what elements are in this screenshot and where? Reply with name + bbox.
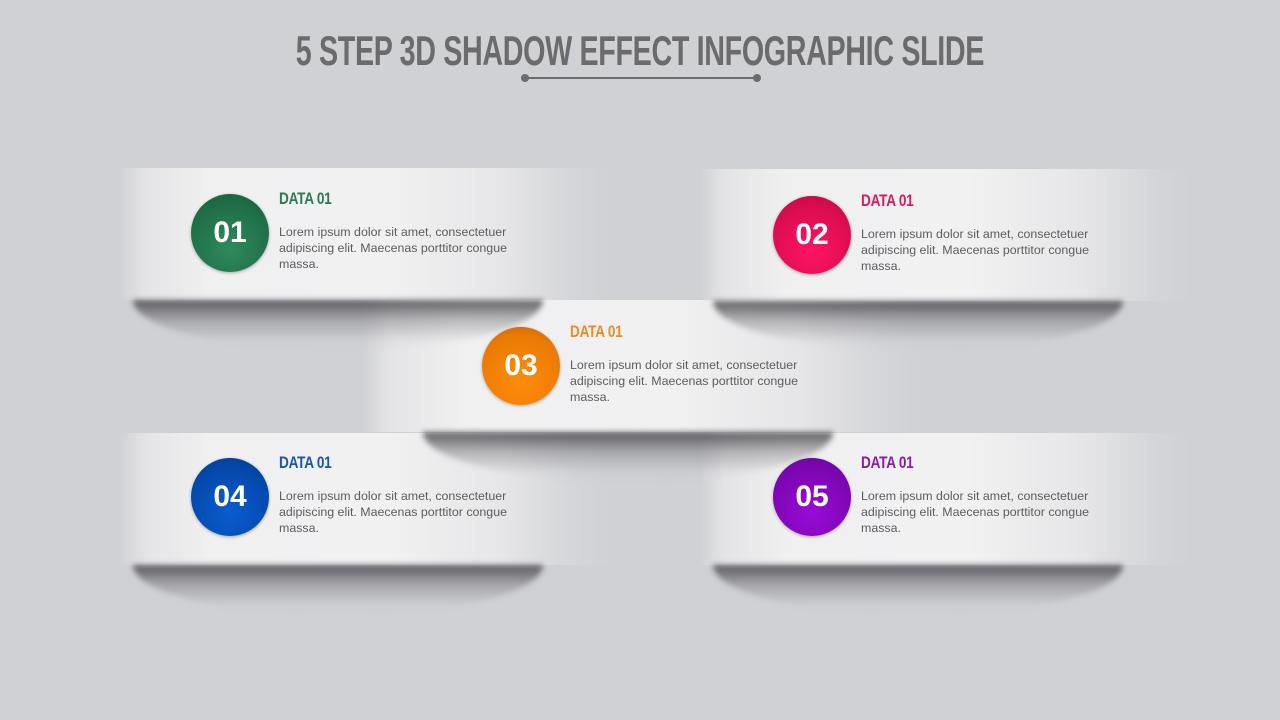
icon: circle 01: 01 (213, 216, 247, 249)
text block 05: Lorem ipsum dolor sit amet, consectetuer adipiscing elit. Maecenas porttitor congue massa. (861, 489, 1089, 535)
title underline (521, 74, 761, 82)
shadow: step 02 (713, 301, 1123, 351)
text block 01: DATA 01 (279, 189, 331, 208)
text block 04 (279, 453, 507, 535)
panel: step 03 band (362, 300, 922, 432)
text block 02: Lorem ipsum dolor sit amet, consectetuer adipiscing elit. Maecenas porttitor congue massa. (861, 227, 1089, 273)
text block 05: DATA 01 (861, 453, 913, 472)
icon: circle 05: 05 (795, 480, 829, 513)
text block 03: Lorem ipsum dolor sit amet, consectetuer adipiscing elit. Maecenas porttitor congue massa. (570, 358, 798, 404)
panel: step 04 band (120, 433, 610, 565)
text block 03 (570, 322, 798, 404)
text block 03: DATA 01 (570, 322, 622, 341)
icon: circle 05 (773, 458, 851, 536)
icon: circle 02 (773, 196, 851, 274)
text block 02: DATA 01 (861, 191, 913, 210)
panel: step 05 band (700, 433, 1190, 565)
icon: circle 04 (191, 458, 269, 536)
icon: circle 03 (482, 327, 560, 405)
text block 01: Lorem ipsum dolor sit amet, consectetuer adipiscing elit. Maecenas porttitor congue massa. (279, 225, 507, 271)
shadow: step 04 (133, 565, 543, 615)
panel: step 02 band (700, 169, 1190, 301)
shadow: step 03 (423, 432, 833, 482)
text block 02 (861, 191, 1089, 273)
shadow: step 05 (713, 565, 1123, 615)
icon: circle 02: 02 (795, 218, 829, 251)
shadow: step 01 (133, 300, 543, 350)
text block 01 (279, 189, 507, 271)
text block 04: Lorem ipsum dolor sit amet, consectetuer adipiscing elit. Maecenas porttitor congue massa. (279, 489, 507, 535)
text block 05 (861, 453, 1089, 535)
panel: step 01 band (120, 168, 610, 300)
text block 04: DATA 01 (279, 453, 331, 472)
icon: circle 04: 04 (213, 480, 247, 513)
icon: circle 01 (191, 194, 269, 272)
icon: circle 03: 03 (504, 349, 538, 382)
title: 5 STEP 3D SHADOW EFFECT INFOGRAPHIC SLIDE (296, 27, 984, 74)
